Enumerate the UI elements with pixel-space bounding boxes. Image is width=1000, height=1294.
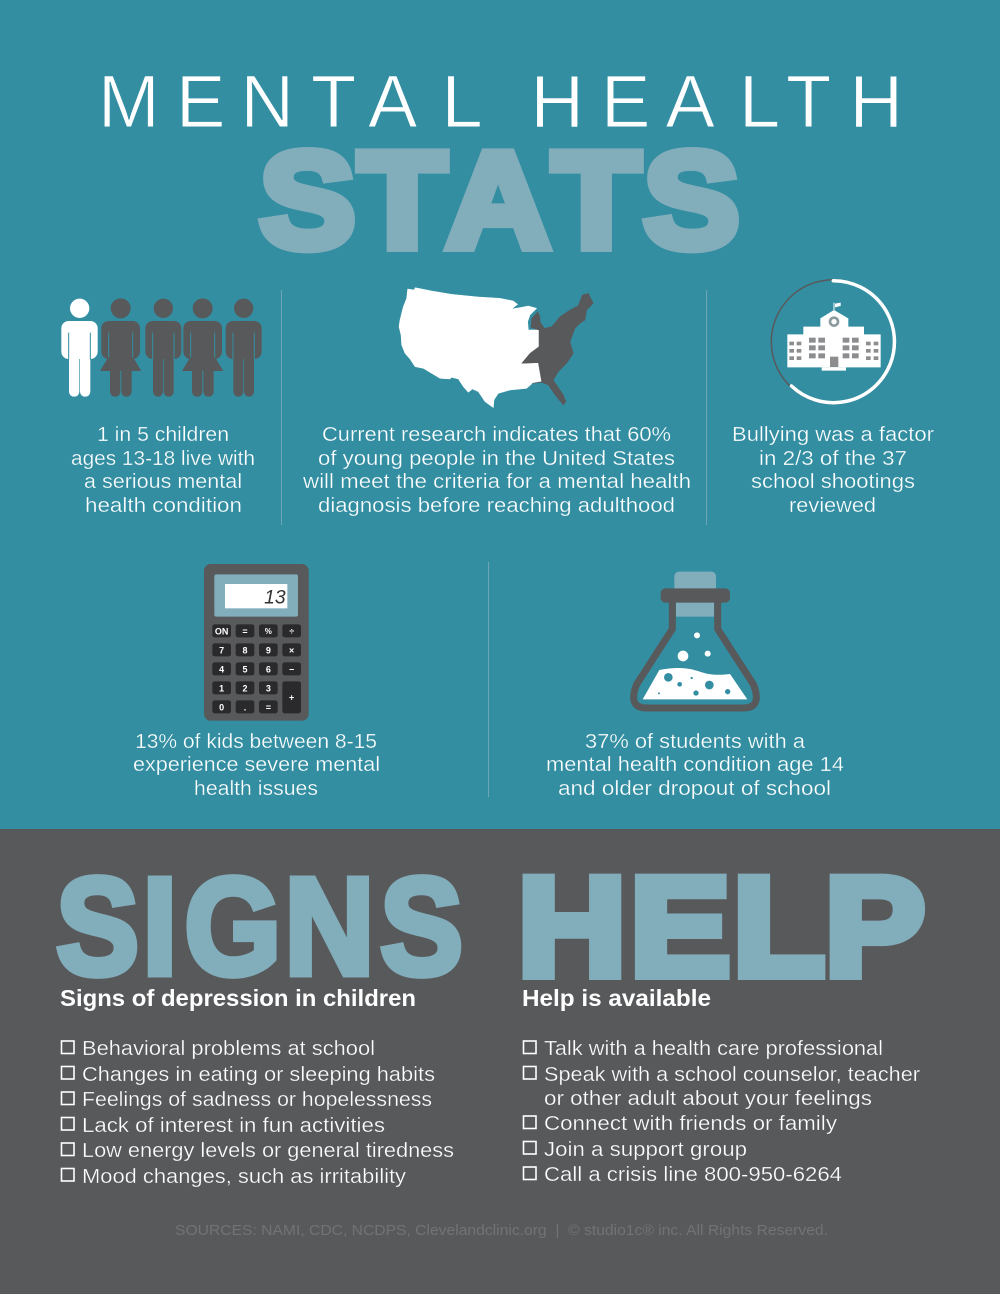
stat text: 37 percent: mental health condition age 14 bbox=[546, 753, 844, 776]
icon: school in progress ring bbox=[771, 280, 895, 404]
checklist: signs: Feelings of sadness or hopelessness bbox=[82, 1088, 432, 1111]
icon: calculator: 6 bbox=[266, 664, 271, 674]
stat text: bullying: Bullying was a factor bbox=[732, 423, 934, 446]
icon: calculator: . bbox=[244, 702, 246, 712]
icon: calculator: % bbox=[265, 627, 272, 636]
icon: calculator: ÷ bbox=[289, 626, 294, 636]
checklist: help: or other adult about your feelings bbox=[544, 1087, 872, 1110]
icon: calculator: 1 bbox=[219, 683, 224, 693]
subheading: help is available: Help is available bbox=[522, 985, 711, 1011]
icon: calculator: 8 bbox=[242, 645, 247, 655]
icon: calculator: 0 bbox=[219, 702, 224, 712]
icon: calculator: 9 bbox=[266, 645, 271, 655]
icon: calculator: 13 bbox=[264, 587, 286, 608]
stat text: current research bbox=[302, 423, 691, 517]
stat text: 37 percent: 37% of students with a bbox=[585, 730, 806, 753]
stat text: 37 percent: and older dropout of school bbox=[558, 777, 831, 800]
stat text: bullying: school shootings bbox=[751, 470, 915, 493]
icon: calculator: = bbox=[266, 702, 271, 712]
icon: calculator: 4 bbox=[219, 664, 224, 674]
checklist: signs: Mood changes, such as irritability bbox=[82, 1165, 407, 1188]
icon: calculator bbox=[204, 564, 309, 721]
stat text: current research: Current research indicates that 60% bbox=[322, 423, 671, 446]
checklist: signs bbox=[62, 1037, 454, 1188]
checklist: signs: Low energy levels or general tiredness bbox=[82, 1139, 454, 1162]
stat text: 1 in 5 children: 1 in 5 children bbox=[97, 423, 229, 446]
checklist: help: Call a crisis line 800-950-6264 bbox=[544, 1163, 842, 1186]
title: mental health: MENTAL HEALTH bbox=[98, 60, 903, 143]
stat text: 1 in 5 children bbox=[71, 423, 255, 517]
icon: calculator: + bbox=[289, 693, 294, 703]
icon: calculator: × bbox=[289, 645, 294, 655]
stat text: 1 in 5 children: ages 13-18 live with bbox=[71, 447, 255, 470]
icon: calculator: 5 bbox=[242, 664, 247, 674]
stat text: bullying: in 2/3 of the 37 bbox=[759, 447, 907, 470]
heading: help: HELP bbox=[518, 849, 925, 1005]
icon: calculator: − bbox=[289, 664, 294, 674]
icon: US map with eastern states highlighted bbox=[399, 288, 593, 408]
stat text: 13 percent: health issues bbox=[194, 777, 318, 800]
subheading: signs of depression: Signs of depression in children bbox=[60, 985, 416, 1011]
icon: flask bbox=[634, 572, 756, 708]
stat text: 13 percent: experience severe mental bbox=[133, 753, 380, 776]
icon: calculator: 3 bbox=[266, 683, 271, 693]
checklist: signs: Changes in eating or sleeping habits bbox=[82, 1063, 435, 1086]
stat text: 37 percent bbox=[546, 730, 844, 800]
footer: sources: SOURCES: NAMI, CDC, NCDPS, Clevelandclinic.org | © studio1c® inc. All Rights Reserved. bbox=[175, 1222, 828, 1239]
stat text: current research: diagnosis before reaching adulthood bbox=[318, 494, 675, 517]
stat text: 13 percent bbox=[133, 730, 380, 800]
stat text: current research: of young people in the United States bbox=[318, 447, 675, 470]
icon: calculator: 2 bbox=[242, 683, 247, 693]
stat text: 13 percent: 13% of kids between 8-15 bbox=[135, 730, 377, 753]
icon: calculator: ON bbox=[215, 626, 228, 636]
heading: signs: SIGNS bbox=[56, 849, 463, 1003]
checklist: help bbox=[524, 1037, 920, 1186]
title: stats: STATS bbox=[260, 123, 739, 276]
stat text: 1 in 5 children: a serious mental bbox=[84, 470, 242, 493]
checklist: help: Connect with friends or family bbox=[544, 1112, 838, 1135]
stat text: bullying: reviewed bbox=[789, 494, 876, 517]
stat text: 1 in 5 children: health condition bbox=[85, 494, 242, 517]
icon: five people bbox=[61, 298, 262, 397]
icon: calculator: = bbox=[242, 626, 248, 636]
checklist: signs: Behavioral problems at school bbox=[82, 1037, 375, 1060]
stat text: bullying bbox=[732, 423, 934, 517]
stat text: current research: will meet the criteria for a mental health bbox=[302, 470, 691, 493]
icon: calculator: 7 bbox=[219, 645, 224, 655]
checklist: help: Speak with a school counselor, teacher bbox=[544, 1063, 920, 1086]
checklist: signs: Lack of interest in fun activities bbox=[82, 1114, 385, 1137]
checklist: help: Talk with a health care professional bbox=[544, 1037, 883, 1060]
checklist: help: Join a support group bbox=[544, 1138, 747, 1161]
